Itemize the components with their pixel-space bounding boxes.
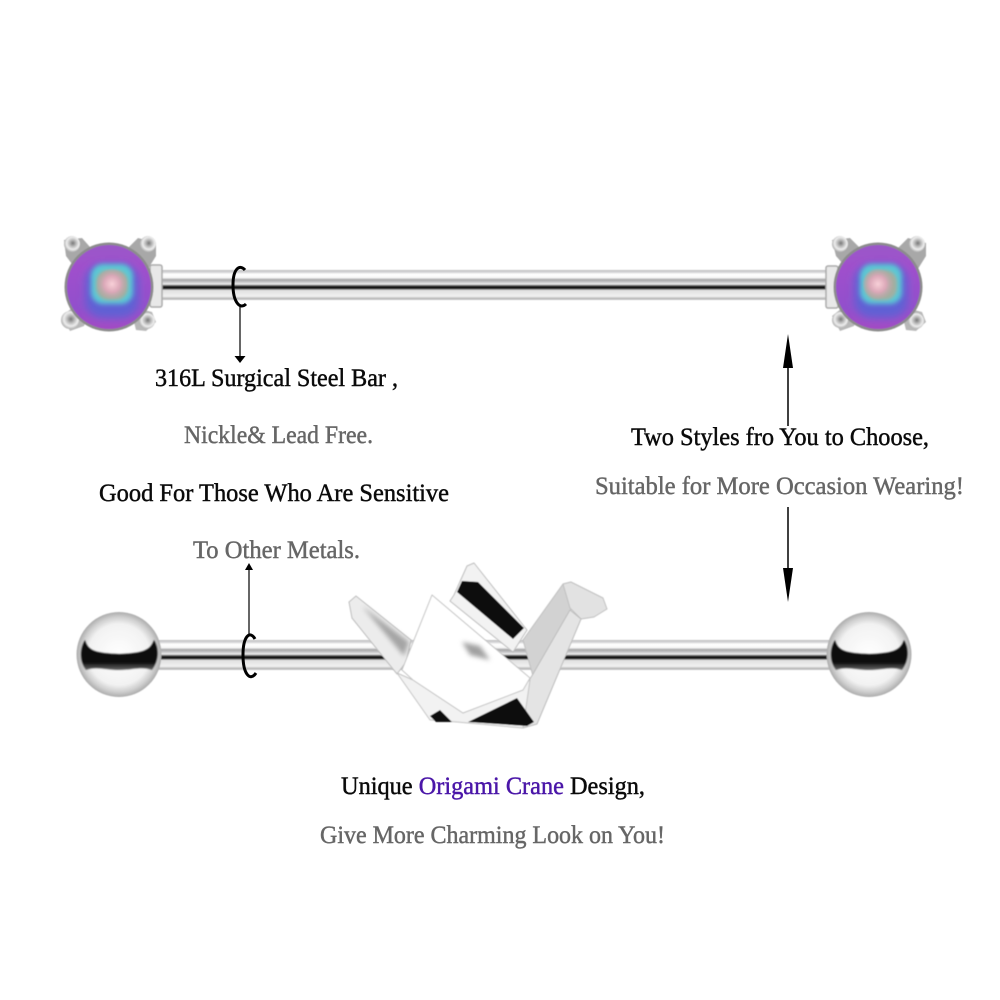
text: sensitive skin: Good For Those Who Are Sensitive [99, 478, 449, 507]
left collar [150, 265, 162, 307]
text: other metals: To Other Metals. [193, 535, 360, 564]
bottom steel bar [155, 640, 835, 670]
arrow up to top barbell [783, 334, 793, 426]
text: two styles: Two Styles fro You to Choose, [631, 422, 929, 451]
arrow down to bottom barbell [783, 507, 793, 602]
text: nickel and lead free: Nickle& Lead Free. [184, 420, 373, 449]
right gem with prongs [832, 236, 926, 332]
right collar [826, 266, 838, 308]
right ball [826, 612, 912, 697]
crane tail [349, 596, 411, 674]
crane head [563, 582, 607, 619]
text: unique crane design: Unique Origami Crane Design, [341, 771, 645, 800]
crane lower fold [397, 673, 530, 728]
origami crane pendant [349, 563, 607, 728]
arrow up to bottom bar from other metals label [245, 563, 253, 634]
text: steel bar heading: 316L Surgical Steel Bar , [155, 363, 398, 392]
crane neck front [520, 610, 581, 728]
top steel bar [162, 270, 826, 300]
crane dark reflections [430, 698, 534, 726]
text: occasion wearing: Suitable for More Occasion Wearing! [595, 471, 964, 500]
arrow down to steel bar label [234, 306, 246, 363]
clip marker on top bar [233, 267, 246, 306]
crane body front [402, 595, 530, 713]
left ball [76, 612, 162, 697]
crane neck rear [523, 582, 572, 676]
left gem with prongs [61, 236, 156, 332]
clip marker on bottom bar [243, 635, 256, 677]
bottom barbell: crane with ball ends [76, 612, 912, 697]
text: charming look: Give More Charming Look on You! [320, 820, 665, 849]
top barbell: purple gem ends [61, 236, 926, 332]
crane back wing [450, 563, 527, 652]
